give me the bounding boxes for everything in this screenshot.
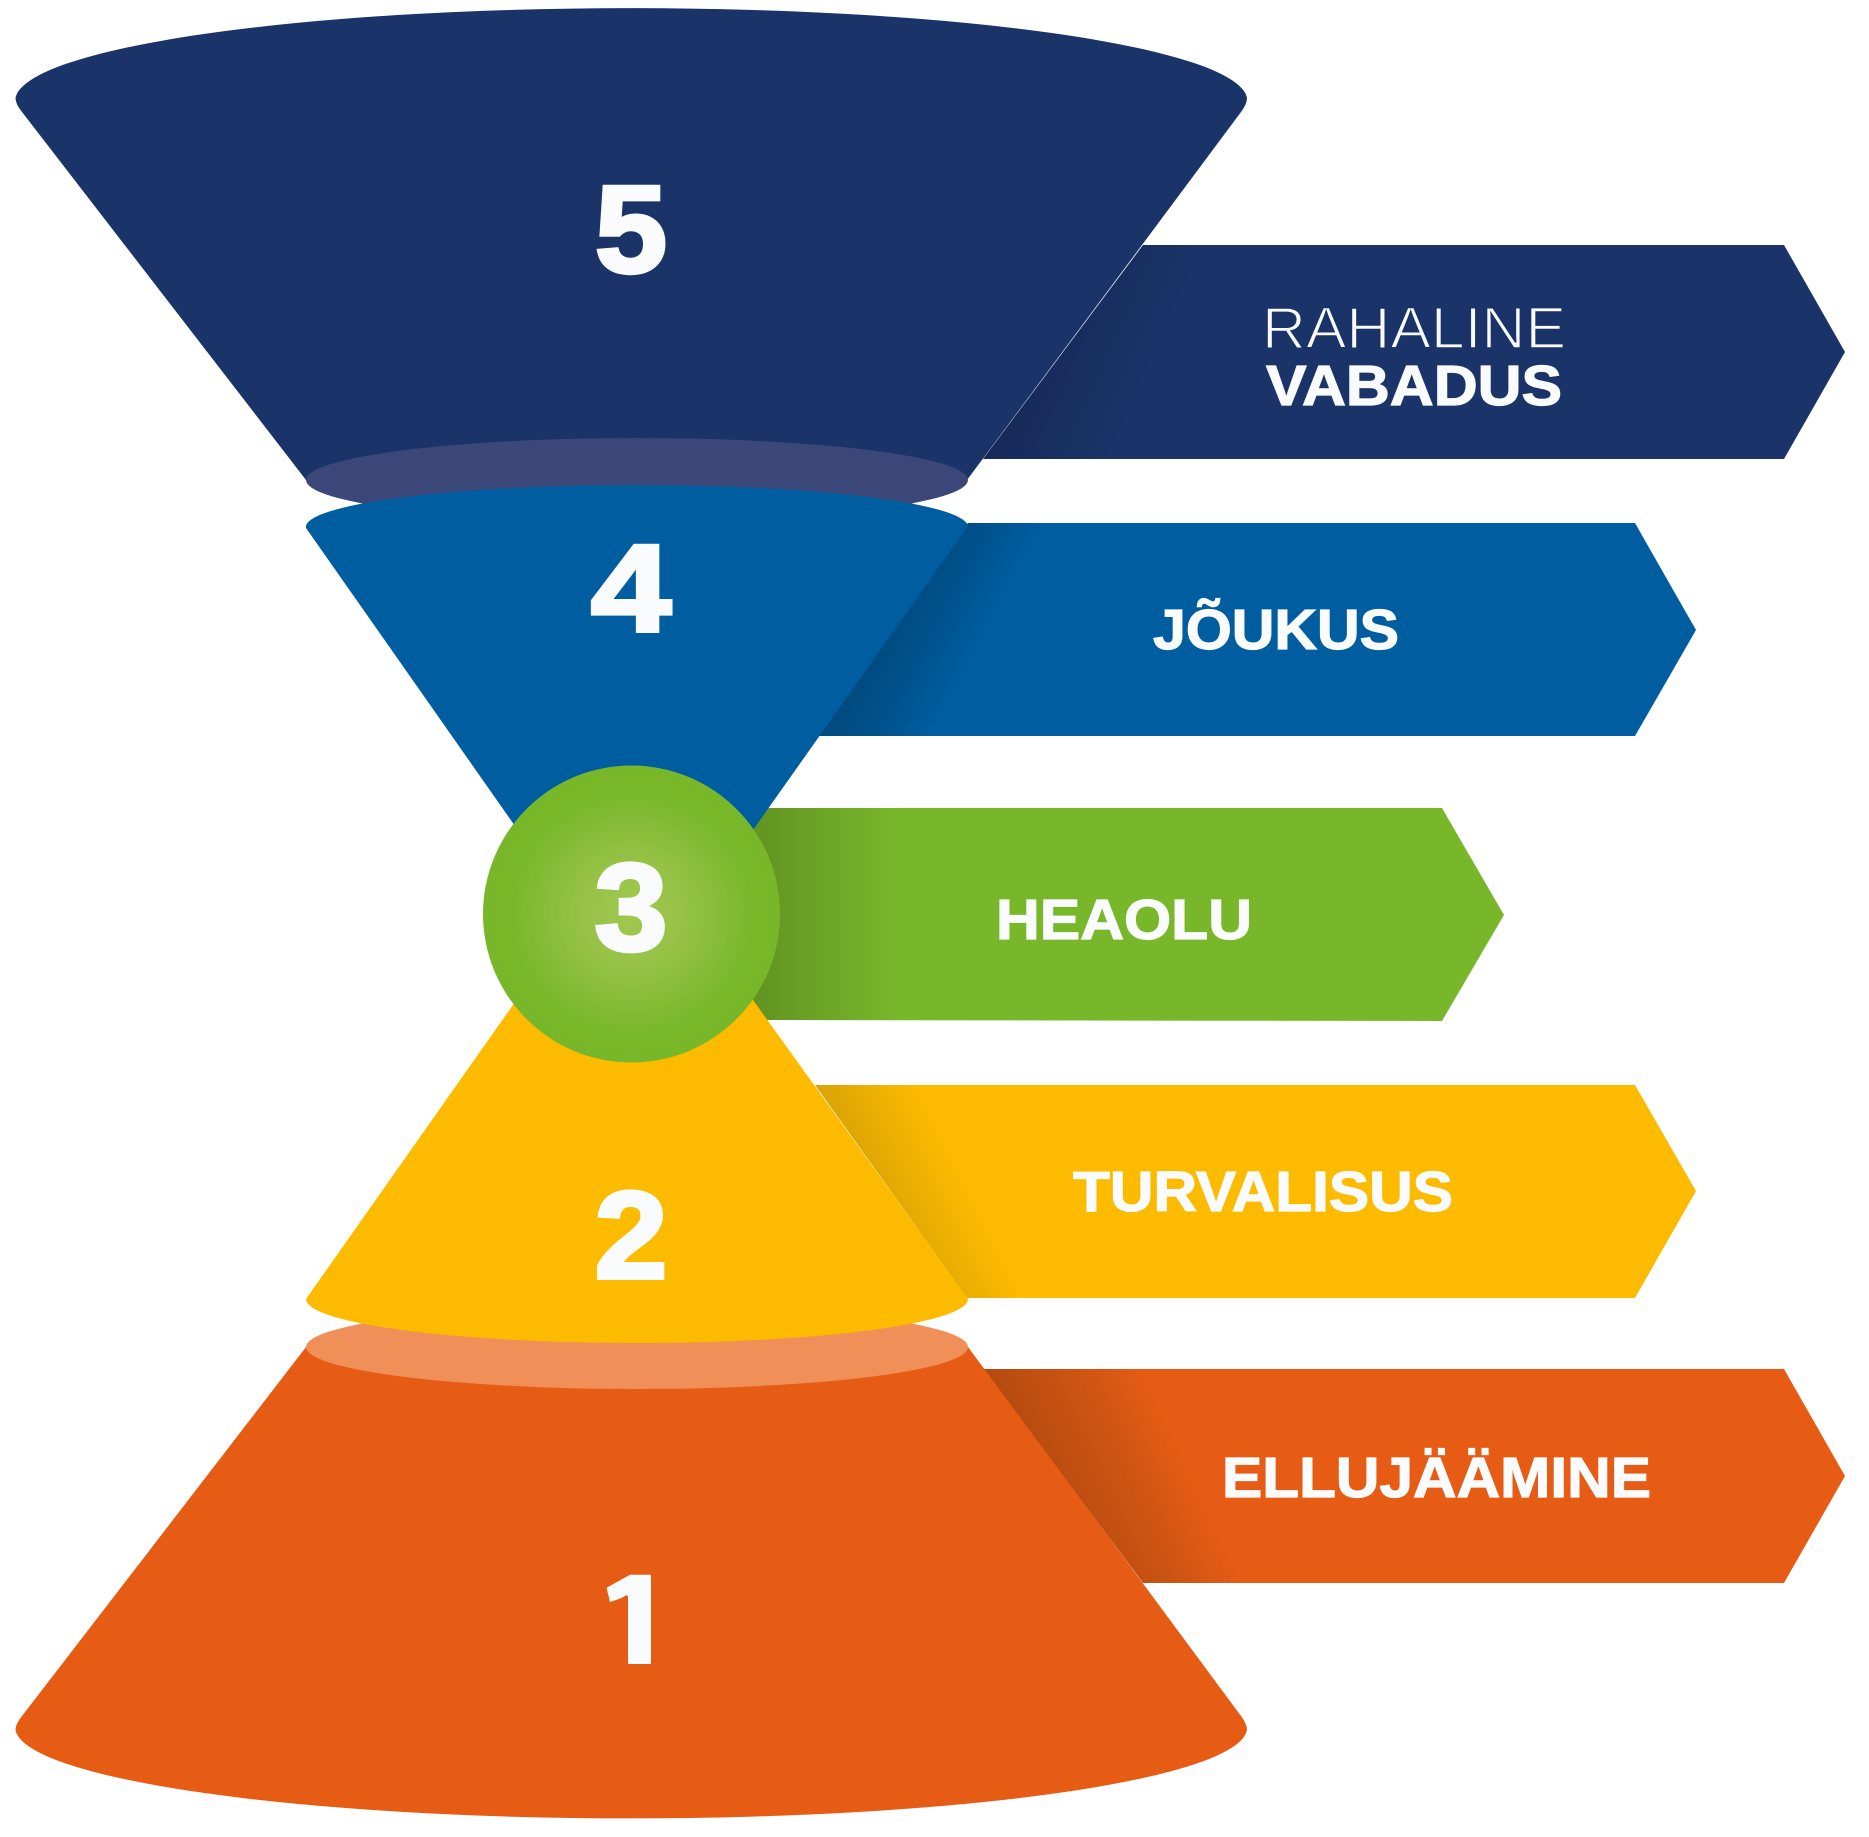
number 2: 2 xyxy=(594,1167,668,1305)
funnel segment 5 xyxy=(16,8,1247,522)
label: rahaline vabadus: VABADUS xyxy=(1266,354,1562,418)
label: rahaline vabadus xyxy=(1262,296,1566,418)
segment 5 lower rim xyxy=(306,438,968,522)
funnel segment 4 xyxy=(306,485,968,830)
banner: ellujaamine xyxy=(983,1369,1845,1583)
label: ellujaamine: ELLUJÄÄMINE xyxy=(1222,1446,1651,1510)
label: heaolu: HEAOLU xyxy=(996,888,1252,952)
banner: heaolu xyxy=(740,808,1504,1021)
funnel segment 2 xyxy=(306,1000,968,1343)
segment 1 upper rim xyxy=(306,1305,968,1389)
number 3: 3 xyxy=(594,839,668,977)
number 4: 4 xyxy=(591,520,671,658)
label: rahaline vabadus: RAHALINE xyxy=(1262,296,1566,361)
number 1: 1 xyxy=(596,1551,676,1689)
banner: joukus xyxy=(818,523,1696,736)
banner: rahaline vabadus xyxy=(983,245,1845,459)
funnel segment 1 xyxy=(16,1305,1247,1818)
banner: turvalisus xyxy=(815,1085,1696,1298)
circle: level 3 xyxy=(483,766,780,1062)
label: joukus: JÕUKUS xyxy=(1153,598,1399,662)
label: turvalisus: TURVALISUS xyxy=(1073,1160,1453,1224)
number 5: 5 xyxy=(595,161,667,299)
